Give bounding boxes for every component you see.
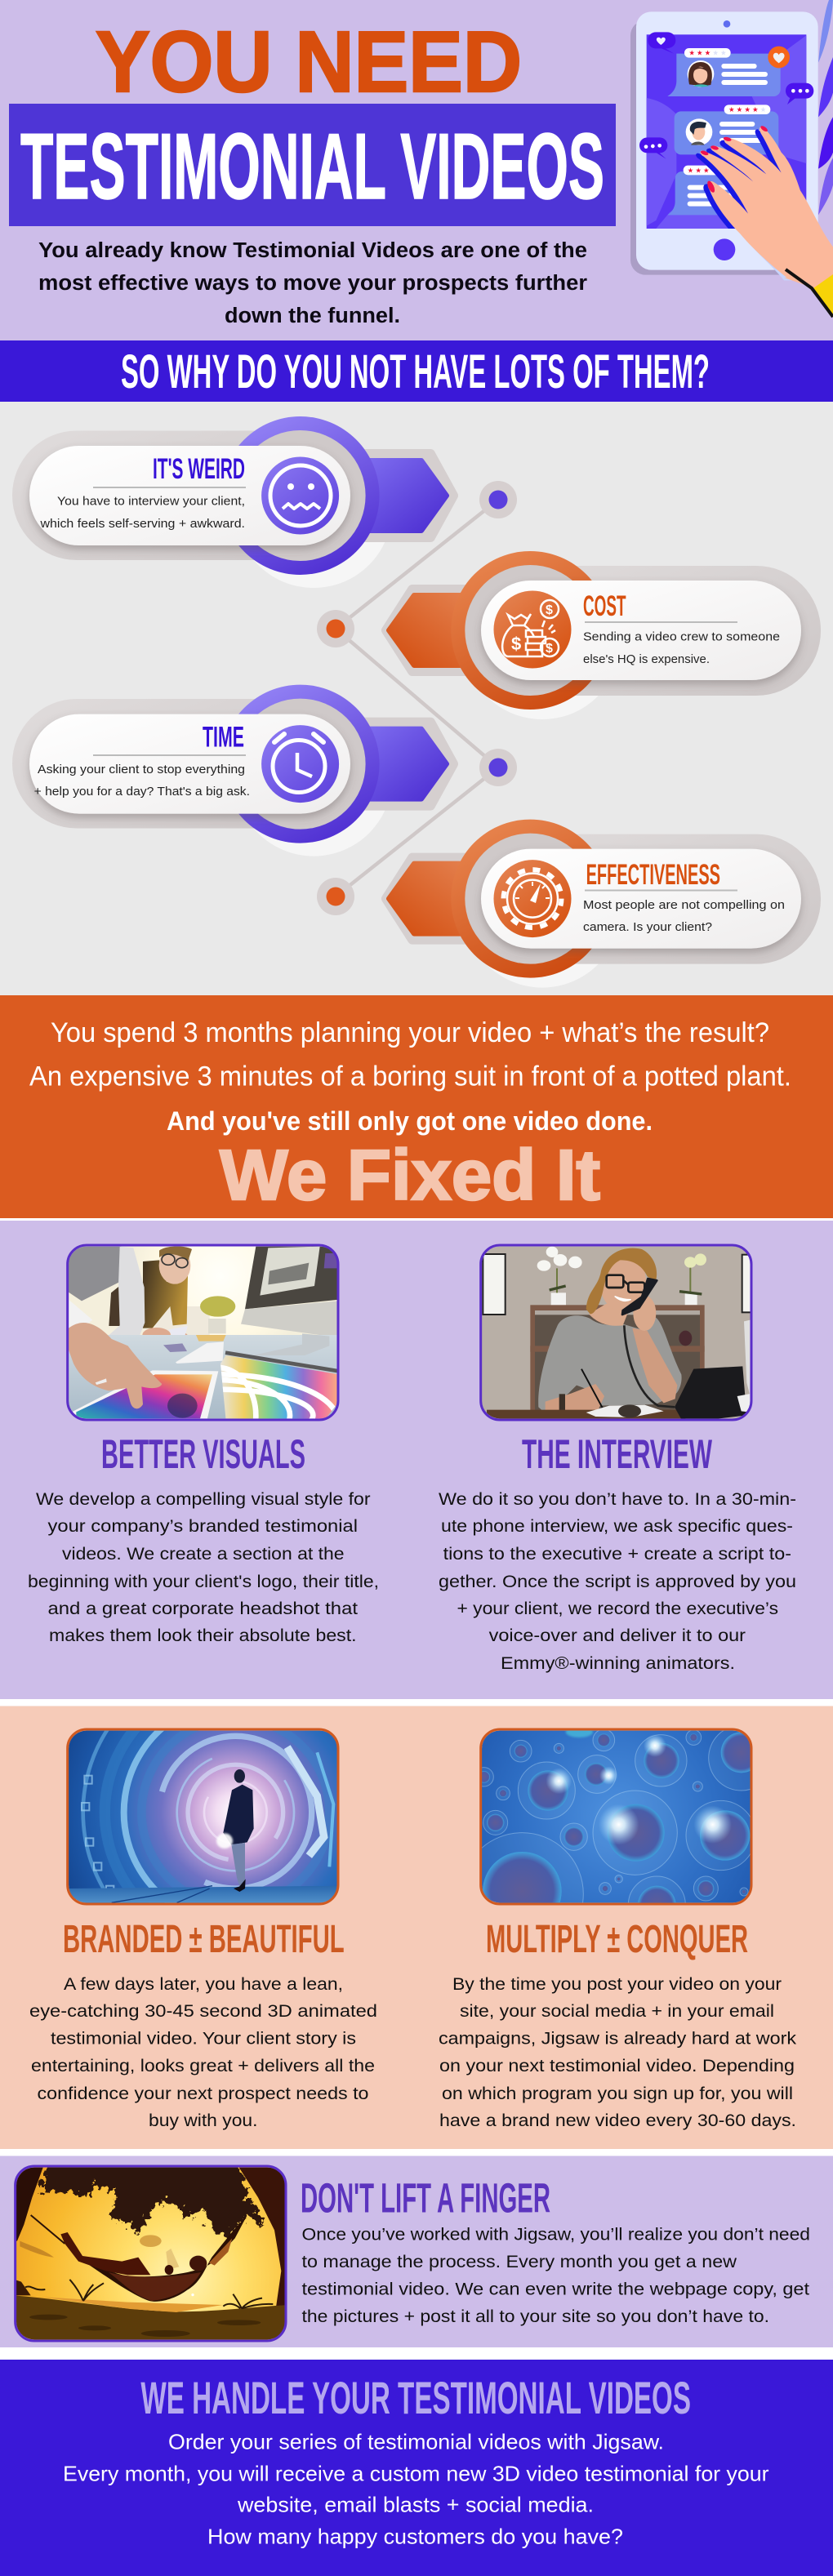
illustration: tablet with reviews and hand: ★	[720, 49, 727, 57]
card: it's weird: You have to interview your client,	[57, 495, 245, 508]
illustration: tablet with reviews and hand: ★	[695, 166, 702, 174]
text: better visuals: beginning with your client's logo, their title,	[28, 1573, 379, 1591]
text: call to action: website, email blasts + social media.	[237, 2493, 594, 2517]
icon: money bag and coins	[493, 591, 572, 668]
text: the interview: voice-over and deliver it to our	[489, 1626, 746, 1645]
heading: don't lift a finger: DON'T LIFT A FINGER	[301, 2174, 550, 2221]
text: multiply + conquer: By the time you post your video on your	[452, 1975, 782, 1994]
text: multiply + conquer: on your next testimonial video. Depending	[439, 2057, 795, 2075]
panel: don't lift a finger	[0, 2156, 833, 2347]
card: time	[12, 685, 453, 856]
card: time: + help you for a day? That's a big ask.	[34, 785, 250, 799]
text: don't lift a finger: testimonial video. We can even write the webpage copy, get	[302, 2280, 809, 2299]
card: effectiveness	[386, 820, 821, 988]
illustration: tablet with reviews and hand: ★	[703, 166, 710, 174]
illustration: tablet with reviews and hand: ★	[737, 105, 743, 113]
icon: money bag and coins: $	[546, 642, 553, 656]
illustration: tablet with reviews and hand: ★	[712, 49, 719, 57]
text: better visuals: and a great corporate headshot that	[47, 1599, 358, 1618]
illustration: tablet with reviews and hand: ★	[744, 105, 751, 113]
panel: the problem and we fixed it: An expensive 3 minutes of a boring suit in front of a potted plant.	[29, 1061, 791, 1092]
card: cost	[386, 551, 821, 719]
photo: designers with colour swatches	[66, 1244, 340, 1421]
intro text: down the funnel.	[225, 305, 400, 327]
text: the interview: gether. Once the script is approved by you	[439, 1573, 796, 1591]
card: it's weird: which feels self-serving + awkward.	[39, 517, 245, 531]
heading: branded + beautiful: BRANDED ± BEAUTIFUL	[63, 1918, 345, 1961]
node dots	[317, 481, 517, 915]
icon: gear with gauge	[493, 860, 572, 937]
text: better visuals	[28, 1490, 379, 1645]
text: branded + beautiful	[29, 1975, 377, 2130]
text: branded + beautiful: buy with you.	[149, 2111, 258, 2130]
panel: call to action	[0, 2360, 833, 2576]
icon: money bag and coins: $	[511, 634, 521, 654]
illustration: tablet with reviews and hand: ★	[760, 105, 767, 113]
text: better visuals: makes them look their absolute best.	[49, 1626, 357, 1645]
text: multiply + conquer: have a brand new video every 30-60 days.	[439, 2111, 796, 2130]
text: the interview: We do it so you don’t have to. In a 30-min-	[439, 1490, 796, 1509]
illustration: tablet with reviews and hand: ★	[688, 49, 695, 57]
text: multiply + conquer: campaigns, Jigsaw is already hard at work	[439, 2030, 797, 2048]
panel: objections diagram	[0, 402, 833, 995]
illustration: tablet with reviews and hand	[630, 0, 833, 317]
heading: better visuals: BETTER VISUALS	[101, 1431, 305, 1477]
illustration: tablet with reviews and hand: ★	[711, 166, 718, 174]
text: don't lift a finger	[302, 2226, 810, 2326]
photo: figure in digital tunnel	[66, 1728, 340, 1906]
panel: branded and multiply	[0, 1706, 833, 2149]
text: branded + beautiful: confidence your next prospect needs to	[38, 2084, 368, 2103]
text: call to action: Every month, you will receive a custom new 3D video testimonial for your	[63, 2461, 769, 2485]
text: don't lift a finger: the pictures + post it all to your site so you don’t have to.	[302, 2307, 769, 2326]
card: effectiveness: EFFECTIVENESS	[586, 859, 720, 891]
text: branded + beautiful: eye-catching 30-45 second 3D animated	[29, 2002, 377, 2021]
illustration: tablet with reviews and hand: ★	[752, 105, 759, 113]
text: the interview: ute phone interview, we ask specific ques-	[441, 1517, 793, 1536]
text: better visuals: videos. We create a section at the	[62, 1545, 345, 1564]
text: branded + beautiful: testimonial video. Your client story is	[51, 2030, 356, 2048]
icon: money bag and coins: $	[546, 603, 553, 617]
text: the interview: + your client, we record the executive’s	[457, 1599, 778, 1618]
text: call to action: How many happy customers do you have?	[207, 2525, 623, 2549]
illustration: tablet with reviews and hand: ★	[697, 49, 703, 57]
photo: glowing blue cells	[479, 1728, 753, 1906]
text: the interview: Emmy®-winning animators.	[501, 1654, 735, 1673]
text: multiply + conquer: on which program you sign up for, you will	[442, 2084, 793, 2103]
card: it's weird: IT'S WEIRD	[153, 453, 245, 485]
card: cost: COST	[583, 590, 626, 622]
text: call to action	[63, 2430, 769, 2549]
text: don't lift a finger: to manage the process. Every month you get a new	[302, 2253, 737, 2271]
text: call to action: Order your series of testimonial videos with Jigsaw.	[168, 2430, 664, 2454]
text: the interview: tions to the executive + create a script to-	[443, 1545, 791, 1564]
illustration: tablet with reviews and hand: ★	[728, 105, 735, 113]
text: branded + beautiful: A few days later, you have a lean,	[64, 1975, 343, 1994]
icon: alarm clock	[261, 725, 339, 803]
text: multiply + conquer: site, your social media + in your email	[460, 2002, 774, 2021]
photo: woman on telephone	[479, 1241, 756, 1424]
text: multiply + conquer	[439, 1975, 797, 2130]
text: better visuals: We develop a compelling visual style for	[36, 1490, 370, 1509]
card: it's weird	[12, 416, 453, 588]
card: effectiveness: Most people are not compelling on	[583, 898, 785, 912]
intro text: most effective ways to move your prospects further	[38, 272, 587, 295]
text: the interview	[439, 1490, 796, 1673]
panel: hero	[0, 0, 833, 340]
panel: the problem and we fixed it	[0, 995, 833, 1218]
text: don't lift a finger: Once you’ve worked with Jigsaw, you’ll realize you don’t need	[302, 2226, 810, 2244]
card: effectiveness: camera. Is your client?	[583, 920, 712, 934]
heading: we fixed it: We Fixed It	[220, 1136, 600, 1215]
card: cost: else's HQ is expensive.	[583, 652, 710, 666]
title: you need: YOU NEED	[96, 14, 522, 110]
card: time: TIME	[203, 722, 244, 754]
intro text: You already know Testimonial Videos are one of the	[38, 239, 587, 262]
panel: visuals and interview	[0, 1221, 833, 1699]
photo: hammock at sunset	[13, 2162, 291, 2345]
title banner: testimonial videos	[9, 104, 616, 226]
intro text	[38, 239, 587, 327]
illustration: tablet with reviews and hand: ★	[705, 49, 711, 57]
heading: the interview: THE INTERVIEW	[522, 1431, 712, 1477]
icon: frown face	[261, 457, 339, 534]
illustration: tablet with reviews and hand: ★	[688, 166, 694, 174]
panel: the problem and we fixed it: You spend 3 months planning your video + what’s the result?	[51, 1017, 769, 1048]
connector lines	[336, 500, 498, 896]
text: better visuals: your company’s branded testimonial	[47, 1517, 358, 1536]
panel: the problem and we fixed it: And you've still only got one video done.	[167, 1106, 653, 1136]
card: cost: Sending a video crew to someone	[583, 630, 780, 644]
card: time: Asking your client to stop everything	[38, 763, 245, 776]
text: branded + beautiful: entertaining, looks great + delivers all the	[31, 2057, 375, 2075]
